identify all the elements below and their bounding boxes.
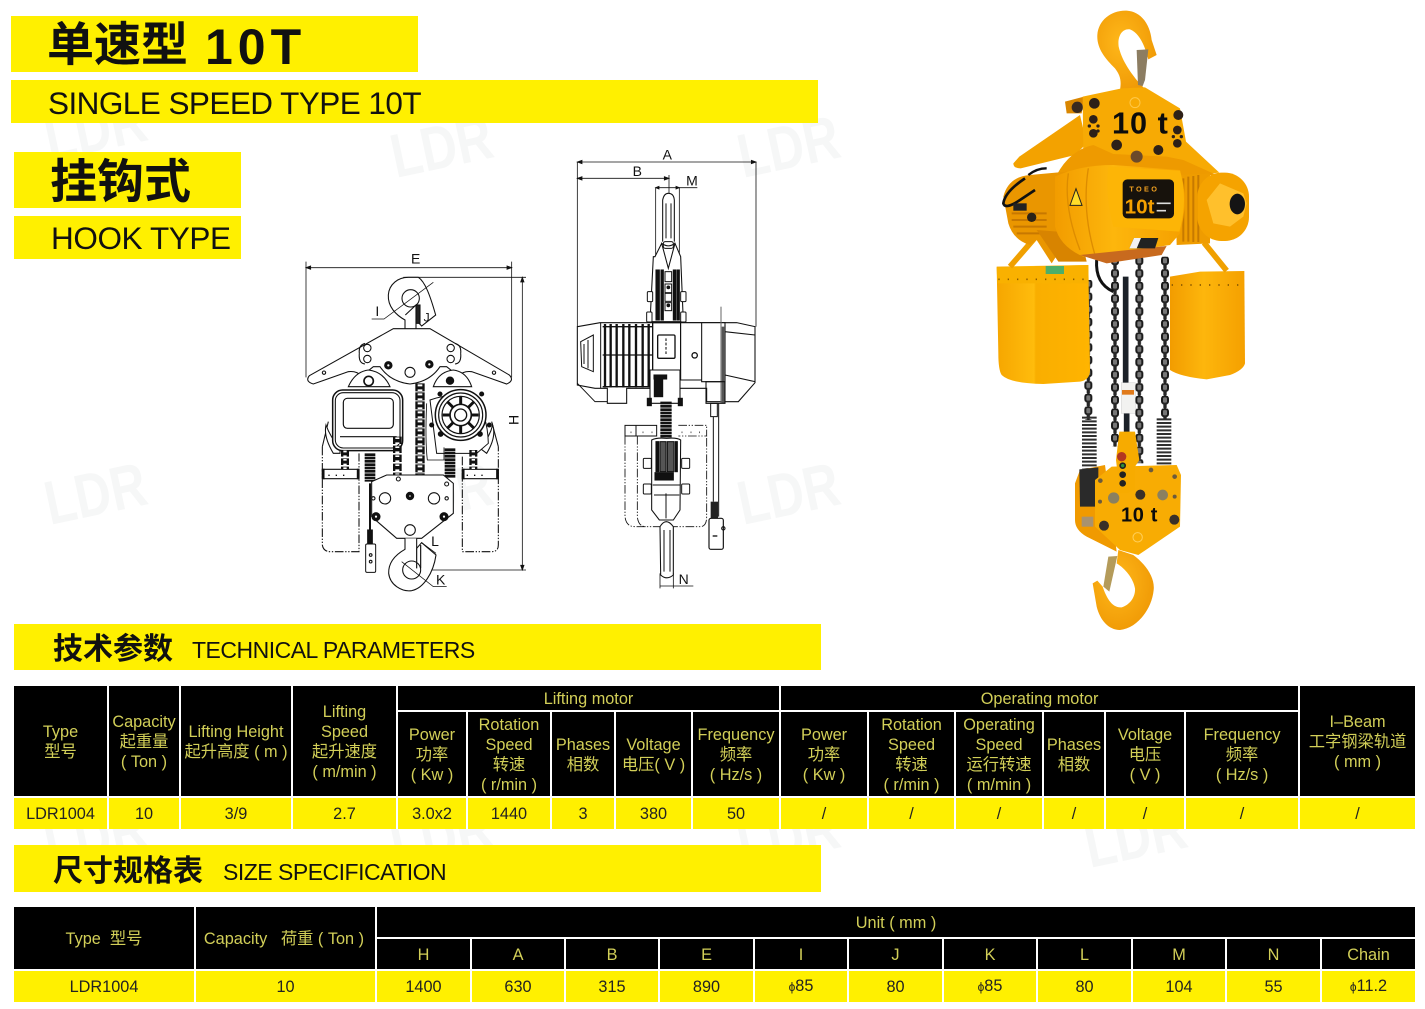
load chains: [345, 383, 473, 478]
size specification table: [14, 907, 1415, 1002]
technical parameters table: Frequency: [1204, 726, 1281, 744]
technical parameters table: /: [1355, 804, 1360, 822]
subtitle banner: Chinese: [14, 152, 241, 208]
nameplate: [1123, 179, 1174, 218]
size specification table: 630: [504, 978, 532, 996]
section heading: size specification: SIZE SPECIFICATION: [223, 859, 446, 885]
side brackets: [1057, 145, 1217, 175]
subtitle banner: English: [14, 216, 241, 259]
technical parameters table: 工字钢梁轨道: [1309, 733, 1406, 751]
size specification table: LDR1004: [70, 978, 138, 996]
side view dimension drawing: [577, 146, 756, 588]
yoke plate: [1083, 87, 1219, 177]
size specification table: ϕ85: [789, 977, 813, 995]
technical parameters table: ( V ): [1130, 766, 1160, 784]
technical parameters table: 运行转速: [966, 756, 1032, 774]
watermark layer: LDR: [732, 103, 846, 192]
size specification table: Type 型号: [66, 930, 142, 948]
technical parameters table: Voltage: [626, 736, 681, 754]
watermark layer: LDR: [732, 793, 846, 882]
size specification table: A: [513, 946, 523, 964]
size specification table: Capacity 荷重 ( Ton ): [204, 930, 364, 948]
technical parameters table: /: [1072, 804, 1076, 822]
chain bag right: [1170, 271, 1245, 379]
product photo: electric chain hoist: 10t: [1125, 195, 1155, 218]
watermark layer: LDR: [385, 793, 499, 882]
size specification table: N: [1268, 946, 1279, 964]
motor side: [577, 323, 755, 403]
section heading: technical parameters: 技术参数: [53, 633, 173, 666]
size specification table: 315: [598, 978, 626, 996]
size specification table: 890: [693, 978, 720, 996]
technical parameters table: 50: [727, 804, 745, 822]
technical parameters table: 频率: [720, 746, 752, 764]
technical parameters table: [14, 686, 1415, 829]
subtitle banner: English: HOOK TYPE: [51, 220, 231, 256]
technical parameters table: 电压( V ): [622, 756, 685, 774]
dimension lines E and H: E: [411, 250, 420, 266]
size specification table: E: [701, 946, 712, 964]
technical parameters table: 相数: [1058, 756, 1090, 774]
bottom hook side: [660, 522, 673, 578]
section heading: size specification: [14, 845, 821, 892]
left yoke arm: [1013, 115, 1087, 168]
cooling fins: [605, 324, 649, 387]
lower block: [1075, 465, 1117, 552]
brand plate: [1129, 238, 1158, 248]
dimensions A B M: B: [633, 163, 642, 179]
cable connector: [1003, 178, 1035, 206]
technical parameters table: Power: [409, 726, 455, 744]
section heading: technical parameters: [14, 624, 821, 670]
watermark layer: LDR: [39, 793, 153, 882]
technical parameters table: /: [997, 804, 1001, 822]
size specification table: B: [607, 946, 617, 964]
watermark layer: LDR: [732, 450, 846, 539]
dimension leaders I and J: [372, 282, 436, 326]
bags: [322, 447, 498, 552]
central motor body: [1055, 165, 1185, 257]
technical parameters table: I–Beam: [1330, 713, 1386, 731]
technical parameters table: /: [822, 804, 826, 822]
front view dimension drawing: L: [431, 533, 439, 549]
size specification table: 1400: [405, 978, 442, 996]
dimension N: [660, 573, 693, 588]
size specification table: J: [891, 946, 900, 964]
dimension leaders K and L: [402, 543, 447, 587]
watermark layer: LDR: [39, 450, 153, 539]
technical parameters table: 3/9: [225, 804, 247, 822]
product photo: electric chain hoist: [997, 11, 1249, 630]
size specification table: 55: [1264, 978, 1283, 996]
technical parameters table: 频率: [1226, 746, 1258, 764]
technical parameters table: Speed: [975, 736, 1023, 754]
subtitle banner: Chinese: 挂钩式: [50, 155, 191, 208]
technical parameters table: ( r/min ): [481, 776, 537, 794]
size specification table: 10: [276, 978, 295, 996]
lower bracket: [650, 370, 680, 403]
technical parameters table: 10: [135, 804, 153, 822]
title banner: Chinese: [11, 16, 418, 72]
chains: [1084, 257, 1169, 463]
watermark layer: LDR: [1079, 793, 1193, 882]
size specification table: M: [1172, 946, 1186, 964]
right motor fins: [1175, 173, 1210, 245]
technical parameters table: 380: [640, 804, 667, 822]
section heading: size specification: 尺寸规格表: [53, 855, 203, 888]
technical parameters table: ( Kw ): [411, 766, 453, 784]
block capacity mark: 10 t: [1121, 505, 1158, 527]
technical parameters table: /: [1143, 804, 1147, 822]
size specification table: I: [799, 946, 803, 964]
dimension lines E and H: [306, 250, 526, 570]
size specification table: H: [418, 946, 429, 964]
title banner: English: SINGLE SPEED TYPE 10T: [48, 85, 421, 121]
pendant side: [711, 403, 719, 517]
technical parameters table: 1440: [491, 804, 527, 822]
side view dimension drawing: N: [679, 571, 689, 587]
section heading: technical parameters: TECHNICAL PARAMETERS: [192, 637, 475, 663]
technical parameters table: 起重量: [120, 733, 168, 751]
watermark layer: LDR: [385, 450, 499, 539]
size specification table: 80: [1075, 978, 1094, 996]
title banner: English: [11, 80, 818, 123]
product photo: electric chain hoist: TOEO: [1129, 184, 1158, 193]
pendant control: [367, 483, 373, 530]
gearbox side: [653, 323, 681, 378]
technical parameters table: Voltage: [1118, 726, 1172, 744]
technical parameters table: ( mm ): [1334, 753, 1381, 771]
left motor fins: [1003, 172, 1067, 263]
front view dimension drawing: J: [424, 311, 430, 325]
technical parameters table: /: [1240, 804, 1244, 822]
technical parameters table: ( Ton ): [121, 753, 167, 771]
upper block side: [650, 243, 683, 322]
technical parameters table: 功率: [808, 746, 840, 764]
technical parameters table: ( m/min ): [967, 776, 1031, 794]
technical parameters table: 3: [578, 804, 588, 822]
technical parameters table: Rotation: [881, 716, 942, 734]
technical parameters table: ( Hz/s ): [1216, 766, 1268, 784]
bags side: [625, 425, 707, 527]
size specification table: Chain: [1347, 946, 1390, 964]
technical parameters table: Frequency: [698, 726, 774, 744]
front view dimension drawing: K: [436, 572, 446, 588]
spring side: [649, 402, 683, 437]
dimensions A B M: [577, 146, 756, 327]
technical parameters table: 功率: [416, 746, 448, 764]
technical parameters table: Operating motor: [981, 690, 1098, 708]
technical parameters table: Lifting Height: [188, 723, 284, 741]
lower block side: [652, 438, 681, 520]
watermark layer: LDR: [385, 103, 499, 192]
dimensions A B M: M: [686, 172, 698, 188]
motor right wheel: [433, 370, 472, 387]
technical parameters table: Phases: [1047, 736, 1101, 754]
technical parameters table: Phases: [556, 736, 610, 754]
yoke: [308, 329, 511, 384]
technical parameters table: Speed: [321, 723, 368, 741]
technical parameters table: LDR1004: [26, 804, 95, 822]
right motor cover: [1197, 173, 1249, 241]
bottom hook: [389, 538, 436, 591]
technical parameters table: 相数: [567, 756, 599, 774]
technical parameters table: ( m/min ): [312, 763, 377, 781]
technical parameters table: ( Hz/s ): [710, 766, 762, 784]
technical parameters table: ( Kw ): [803, 766, 845, 784]
technical parameters table: Power: [801, 726, 847, 744]
technical parameters table: 2.7: [333, 804, 356, 822]
technical parameters table: Operating: [963, 716, 1035, 734]
lower block: [372, 475, 453, 538]
technical parameters table: 起升高度 ( m ): [184, 743, 288, 761]
technical parameters table: Lifting: [323, 703, 366, 721]
technical parameters table: Capacity: [112, 713, 176, 731]
chain bag left: [997, 265, 1090, 384]
bottom hook: [1093, 550, 1154, 630]
white cable tag: [1121, 383, 1135, 413]
warning triangle: [1070, 189, 1082, 205]
technical parameters table: 起升速度: [312, 743, 377, 761]
title banner: Chinese: 单速型: [47, 18, 188, 71]
top hook: [388, 277, 436, 329]
technical parameters table: 3.0x2: [412, 804, 452, 822]
technical parameters table: Rotation: [479, 716, 539, 734]
dimensions A B M: A: [663, 146, 673, 162]
size specification table: ϕ11.2: [1350, 977, 1387, 995]
front view dimension drawing: I: [375, 303, 379, 319]
top hook: [1097, 11, 1157, 90]
motor left: [348, 370, 390, 387]
size specification table: 80: [886, 978, 905, 996]
dimension lines E and H: H: [505, 415, 521, 425]
springs: [370, 448, 450, 482]
yoke capacity mark: 10 t: [1112, 107, 1169, 141]
technical parameters table: Lifting motor: [544, 690, 633, 708]
pendant: [1116, 432, 1139, 493]
technical parameters table: 电压: [1129, 746, 1161, 764]
size specification table: Unit ( mm ): [856, 914, 936, 932]
watermark layer: LDR: [39, 86, 153, 175]
spring guards: [1089, 417, 1164, 468]
technical parameters table: Speed: [888, 736, 935, 754]
size specification table: 104: [1165, 978, 1193, 996]
technical parameters table: 转速: [493, 756, 525, 774]
technical parameters table: ( r/min ): [883, 776, 940, 794]
technical parameters table: Speed: [485, 736, 533, 754]
technical parameters table: /: [909, 804, 914, 822]
technical parameters table: Type: [43, 723, 78, 741]
technical parameters table: 转速: [895, 756, 928, 774]
title banner: Chinese: 10T: [205, 19, 306, 75]
size specification table: K: [985, 946, 995, 964]
size specification table: L: [1080, 946, 1089, 964]
technical parameters table: 型号: [44, 743, 77, 761]
top hook side: [663, 193, 674, 242]
size specification table: ϕ85: [978, 977, 1002, 995]
